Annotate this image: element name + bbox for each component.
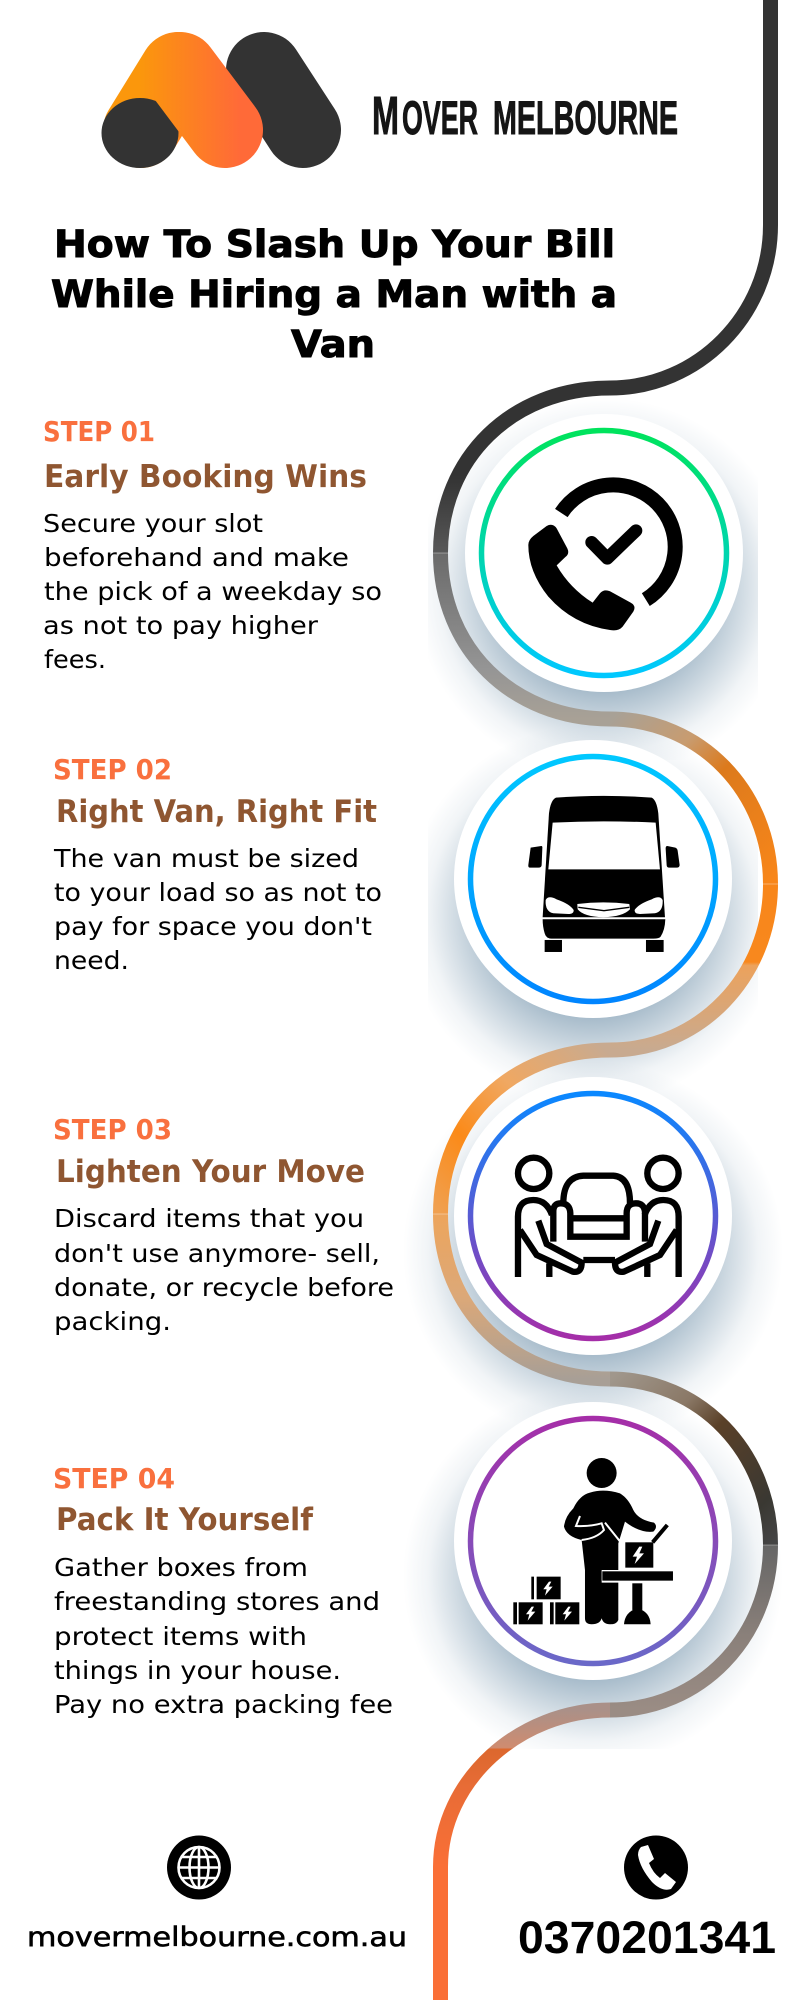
icon: two people carrying a sofa (518, 1158, 679, 1277)
step 03 text: Discard items that you (54, 1204, 364, 1233)
step 02 text: pay for space you don't (54, 912, 372, 941)
logo (102, 70, 678, 168)
step 04 text: protect items with (54, 1622, 307, 1651)
step 04 text: Pay no extra packing fee (54, 1690, 393, 1719)
step 01 text: beforehand and make (44, 543, 349, 572)
step 03 text (54, 1204, 394, 1336)
step 02 text: need. (54, 946, 129, 975)
step 04 text: freestanding stores and (54, 1587, 380, 1616)
panel: step 02 (53, 753, 382, 975)
step 01 label: STEP 01 (43, 415, 155, 448)
icon: person packing boxes (513, 1458, 673, 1624)
step 01 text: Secure your slot (43, 509, 263, 538)
step 01 text: as not to pay higher (43, 611, 319, 640)
step 02 text (53, 844, 382, 975)
step 01 text: fees. (44, 645, 106, 674)
panel: step 03 (53, 1113, 394, 1336)
panel: step 01 (43, 415, 382, 674)
panel: step 04 (53, 1462, 393, 1719)
step 3 icon circle (454, 1077, 732, 1355)
website address: movermelbourne.com.au (27, 1922, 407, 1953)
logo wordmark: M (372, 86, 399, 146)
icon: phone with check mark (528, 485, 675, 630)
icon: van front (528, 796, 680, 952)
website contact (27, 1836, 407, 1953)
logo wordmark: MELBOURNE (493, 91, 678, 144)
step 01 text (43, 509, 382, 674)
icon: globe (167, 1836, 231, 1900)
step 01 text: the pick of a weekday so (44, 577, 382, 606)
circle shadows (417, 413, 768, 1749)
step 04 text (54, 1553, 393, 1719)
phone number: 0370201341 (518, 1912, 776, 1963)
logo mark (102, 70, 303, 168)
logo wordmark (372, 86, 678, 146)
step 2 icon circle (454, 740, 732, 1018)
phone contact (518, 1836, 776, 1963)
step 03 text: don't use anymore- sell, (54, 1239, 380, 1268)
icon: phone (624, 1836, 688, 1900)
step 01 heading: Early Booking Wins (44, 459, 367, 495)
step 03 text: packing. (54, 1307, 171, 1336)
title: While Hiring a Man with a (51, 273, 617, 316)
step 03 text: donate, or recycle before (54, 1273, 394, 1302)
title: Van (291, 323, 375, 366)
step 03 label: STEP 03 (53, 1113, 172, 1146)
step 04 text: Gather boxes from (54, 1553, 308, 1582)
title: How To Slash Up Your Bill (54, 223, 615, 266)
step 02 text: to your load so as not to (54, 878, 382, 907)
step 03 heading: Lighten Your Move (56, 1154, 365, 1190)
step 02 label: STEP 02 (53, 753, 172, 786)
logo wordmark: OVER (402, 91, 478, 144)
step 04 label: STEP 04 (53, 1462, 175, 1495)
step 04 text: things in your house. (54, 1656, 341, 1685)
step 1 icon circle (465, 414, 743, 692)
step 04 heading: Pack It Yourself (56, 1502, 313, 1538)
step 4 icon circle (454, 1402, 732, 1680)
title (51, 223, 617, 366)
step 02 heading: Right Van, Right Fit (56, 794, 377, 830)
winding path connector (433, 0, 778, 2000)
step 02 text: The van must be sized (53, 844, 359, 873)
